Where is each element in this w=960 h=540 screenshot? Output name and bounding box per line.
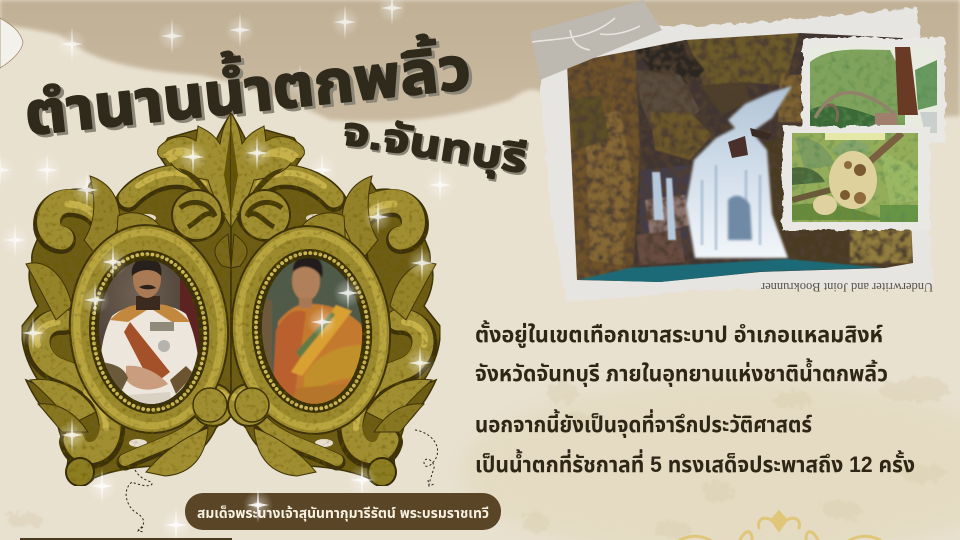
crumpled tape	[530, 0, 662, 80]
torn paper backing	[540, 8, 933, 302]
caption pill: สมเด็จพระนางเจ้าสุนันทากุมารีรัตน์ พระบรมราชเทวี	[197, 506, 489, 522]
photo collage	[530, 0, 945, 302]
frame ring: right	[225, 221, 397, 439]
mirrored newsprint text: Underwriter and Joint Bookrunner	[760, 280, 933, 295]
dashed arrow: right	[415, 430, 438, 486]
caption pill	[185, 493, 501, 530]
gold bottom ornament	[680, 512, 880, 540]
lower center knobs	[193, 388, 269, 422]
paragraph 1	[475, 320, 888, 387]
paragraph 1: จังหวัดจันทบุรี ภายในอุทยานแห่งชาติน้ำตกพลิ้ว	[475, 358, 888, 387]
portrait: Queen Sunanda	[262, 258, 362, 404]
portrait: King Rama V	[98, 260, 200, 404]
small photo: forest	[802, 38, 945, 142]
subtitle: province: จ.จันทบุรี	[339, 109, 530, 184]
paragraph 2: เป็นน้ำตกที่รัชกาลที่ 5 ทรงเสด็จประพาสถึง 12 ครั้ง	[475, 449, 915, 477]
main waterfall photo	[560, 28, 920, 285]
title: ตำนานน้ำตกพลิ้ว	[20, 26, 474, 148]
title: ตำนานน้ำตกพลิ้ว	[24, 28, 477, 151]
frame ring: left	[63, 220, 235, 438]
small photo: flowers	[782, 126, 930, 230]
paragraph 2: นอกจากนี้ยังเป็นจุดที่จารึกประวัติศาสตร์	[475, 409, 812, 438]
pill sparkle	[243, 487, 273, 523]
decorative sparkles behind title	[0, 0, 455, 258]
ornate gold double frame	[22, 113, 440, 486]
tan paper stain at top	[0, 0, 960, 121]
body text	[475, 320, 915, 477]
bottom left dark bar	[20, 538, 232, 540]
dashed arrow: left	[126, 470, 152, 532]
frame sparkles	[18, 135, 437, 540]
torn paper corner, left	[0, 18, 23, 68]
subtitle: province: จ.จันทบุรี	[341, 112, 532, 186]
paragraph 1: ตั้งอยู่ในเขตเทือกเขาสระบาป อำเภอแหลมสิงห์	[475, 320, 883, 348]
paragraph 2	[475, 409, 915, 477]
